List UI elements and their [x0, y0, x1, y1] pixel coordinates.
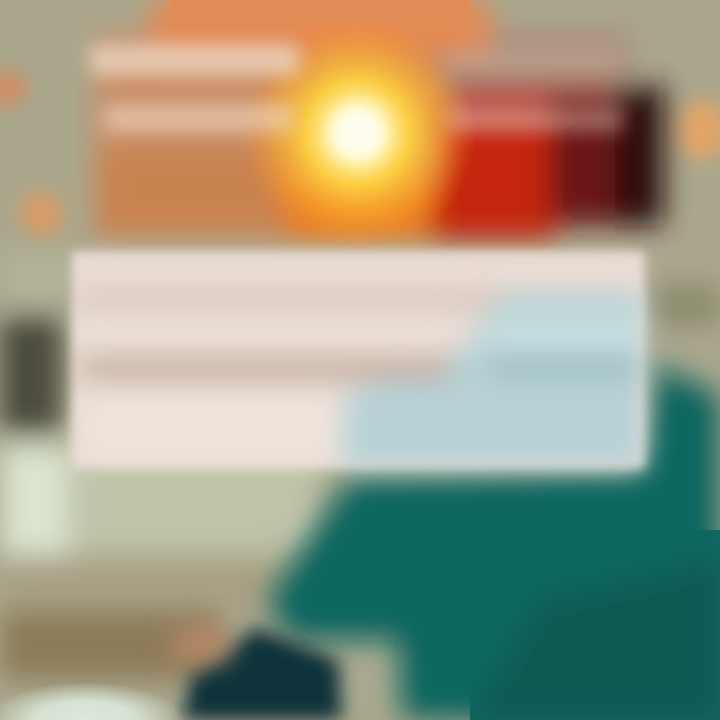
banner: orange and red header background — [95, 0, 663, 251]
icon: glowing sun — [240, 15, 476, 251]
table row shading — [80, 260, 644, 468]
decoration: white blobs bottom left — [0, 650, 185, 720]
background: small orange bokeh lights — [0, 70, 720, 236]
heading: blurred title lines — [90, 44, 625, 132]
person: teal shirt — [170, 365, 720, 720]
panel: translucent data table — [72, 252, 644, 468]
person: hand — [170, 627, 234, 663]
person: dark forearm — [182, 628, 342, 720]
